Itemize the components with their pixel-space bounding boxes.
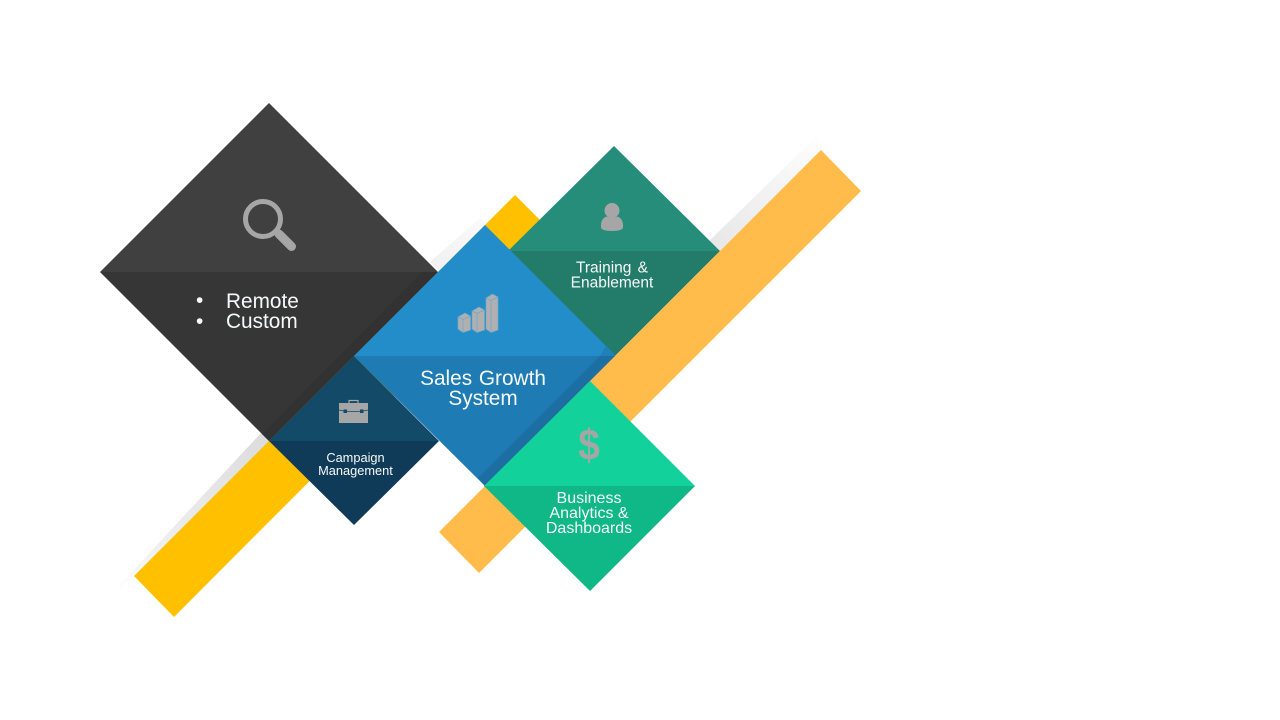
list: remote and custom: Custom [226,310,298,333]
icon: briefcase [339,400,368,423]
label: campaign management: Management [318,463,393,478]
list: remote and custom: • [196,289,203,312]
panel: dark diamond [100,103,438,441]
icon: person [601,203,623,231]
icon: dollar sign: $ [578,420,600,470]
label: training and enablement: Training & [576,260,649,276]
label: business analytics and dashboards: Dashboards [546,520,632,537]
label: training and enablement: Enablement [571,274,654,292]
list: remote and custom: Remote [226,290,299,313]
panel: central blue diamond [354,225,616,486]
shadow of yellow bar [113,218,490,592]
panel: green diamond [484,381,695,591]
panel: teal diamond [508,146,720,357]
icon: magnifying glass [246,202,292,246]
orange diagonal bar [439,150,861,573]
panel: navy diamond [269,356,439,525]
label: business analytics and dashboards: Analytics & [549,505,629,522]
list: remote and custom [196,289,299,333]
label: business analytics and dashboards: Business [557,490,621,507]
shadow of orange bar [704,136,823,258]
yellow diagonal bar [134,195,555,617]
label: campaign management: Campaign [326,450,385,465]
label: sales growth system: Sales Growth [420,367,546,390]
label: sales growth system: System [448,387,518,410]
icon: bar chart [458,294,498,332]
list: remote and custom: • [196,310,203,333]
